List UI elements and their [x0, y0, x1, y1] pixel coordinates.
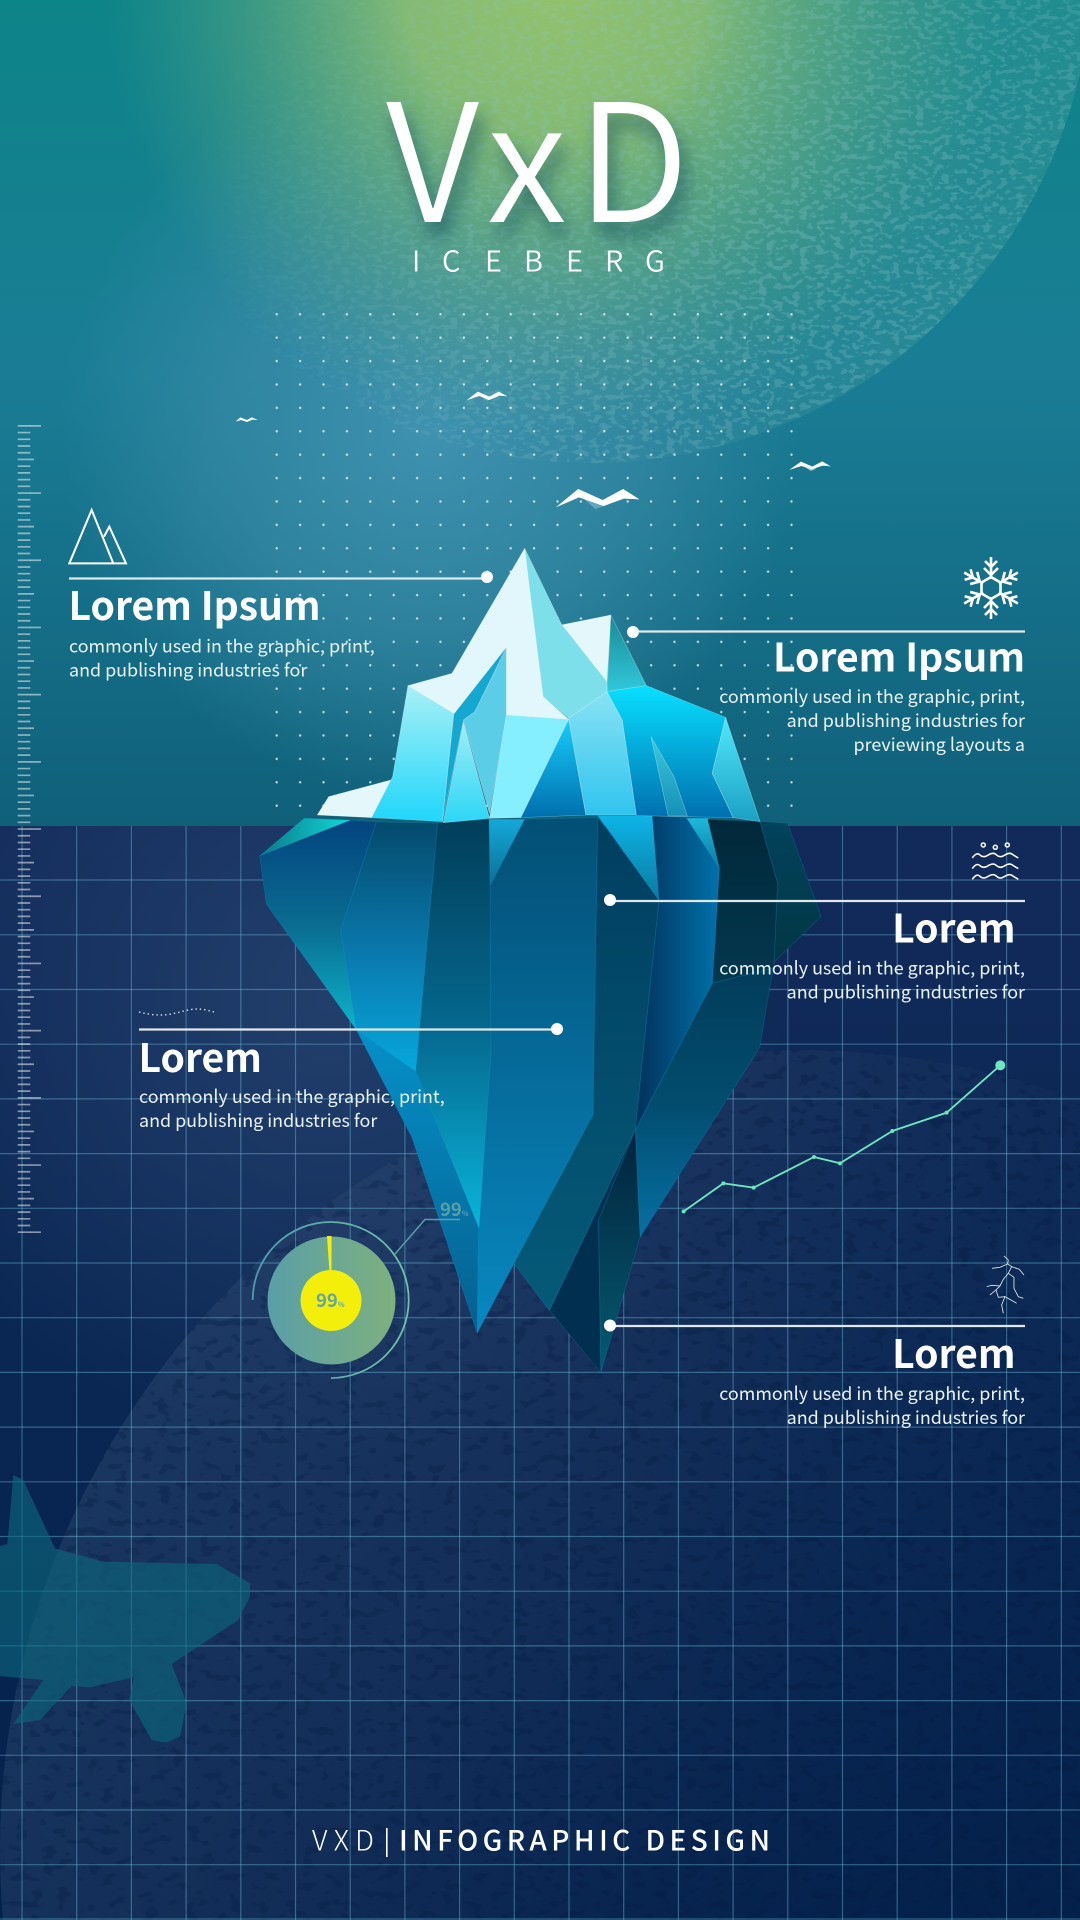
- icon: snowflake: [961, 557, 1021, 619]
- icon: mountain: [69, 510, 126, 563]
- footer divider: [386, 1828, 388, 1857]
- body text: and publishing industries for: [139, 1107, 377, 1133]
- heading: Lorem: [138, 1028, 262, 1084]
- callout: bottom right: [604, 1256, 1025, 1430]
- heading: Lorem Ipsum: [68, 576, 321, 632]
- blueprint grid: [0, 826, 1080, 1920]
- outer arc: [253, 1222, 409, 1378]
- leader value: 99%: [440, 1196, 469, 1222]
- callout: top left: [68, 510, 493, 682]
- yellow slice: [327, 1236, 332, 1272]
- body text: and publishing industries for: [787, 707, 1025, 733]
- donut chart: [253, 1196, 469, 1378]
- body text: and publishing industries for: [787, 978, 1025, 1004]
- leader dot: [627, 626, 639, 638]
- yellow centre: [300, 1270, 362, 1331]
- callout: middle left: [138, 1009, 563, 1133]
- title: VxD: VxD: [386, 33, 689, 270]
- icon: dotted wave: [139, 1009, 214, 1015]
- centre value: 99%: [316, 1287, 345, 1313]
- line chart: [682, 1060, 1005, 1213]
- body text: previewing layouts a: [854, 731, 1025, 757]
- leader line: [633, 630, 1025, 633]
- body text: commonly used in the graphic, print,: [719, 1380, 1025, 1406]
- leader line: [69, 577, 486, 580]
- heading: Lorem Ipsum: [773, 628, 1025, 684]
- iceberg underwater part: [260, 816, 821, 1373]
- callout: middle right: [604, 843, 1025, 1004]
- leader dot: [481, 571, 493, 583]
- iceberg above water: [317, 548, 760, 823]
- birds: [236, 392, 831, 509]
- leader line: [139, 1028, 556, 1031]
- icon: waves: [972, 843, 1018, 879]
- fish silhouette: [0, 1475, 250, 1743]
- heading: Lorem: [892, 1324, 1016, 1380]
- footer tagline: INFOGRAPHIC DESIGN: [399, 1820, 770, 1860]
- icon: lightning: [987, 1256, 1024, 1313]
- leader dot: [604, 894, 616, 906]
- body text: commonly used in the graphic, print,: [139, 1083, 445, 1109]
- heading: Lorem: [892, 898, 1016, 954]
- leader dot: [551, 1023, 563, 1035]
- leader dot: [604, 1320, 616, 1332]
- leader: [395, 1220, 460, 1254]
- sea background: [0, 826, 1080, 1920]
- callout: top right: [627, 557, 1025, 757]
- footer: [312, 1820, 770, 1860]
- body text: commonly used in the graphic, print,: [69, 632, 375, 658]
- iceberg: [260, 548, 821, 1373]
- body text: and publishing industries for: [787, 1404, 1025, 1430]
- title: [386, 33, 689, 280]
- sky background: [0, 0, 1080, 826]
- dot grid: [265, 303, 803, 818]
- leader line: [610, 900, 1025, 902]
- ruler scale: [24, 425, 38, 1233]
- leader line: [610, 1325, 1025, 1327]
- footer brand: VXD: [312, 1820, 374, 1860]
- donut ring: [268, 1236, 396, 1364]
- body text: commonly used in the graphic, print,: [719, 954, 1025, 980]
- body text: and publishing industries for: [69, 656, 307, 682]
- subtitle: ICEBERG: ICEBERG: [412, 238, 665, 280]
- body text: commonly used in the graphic, print,: [719, 683, 1025, 709]
